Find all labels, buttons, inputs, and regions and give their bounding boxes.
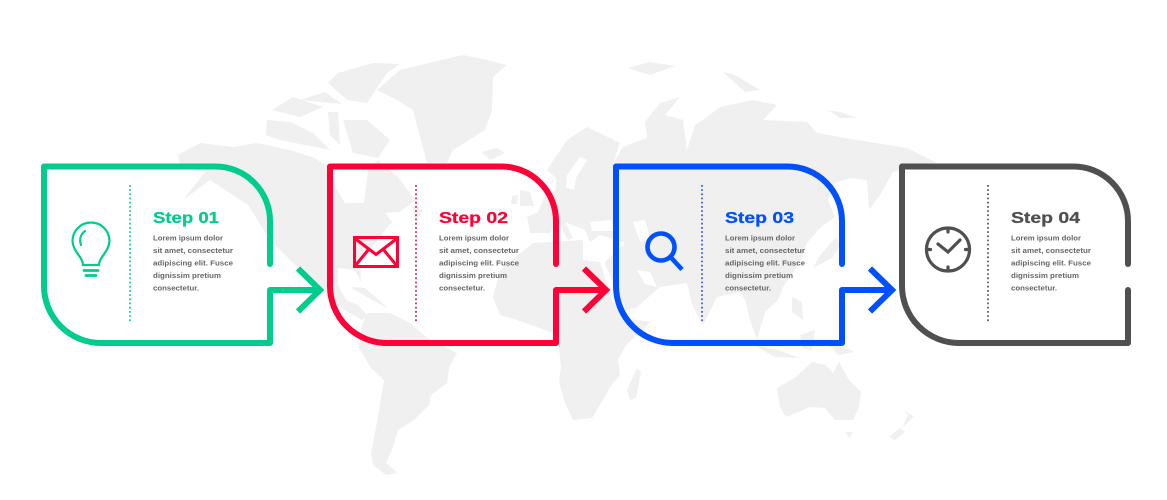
- inland seas: [566, 157, 657, 316]
- Australia: [777, 362, 861, 420]
- dotted divider: [987, 185, 989, 323]
- Eurasia: [527, 97, 937, 340]
- body text: dignissim pretium: [725, 273, 793, 280]
- grey outline: [902, 166, 1128, 343]
- body text: sit amet, consectetur: [1011, 248, 1091, 255]
- body text: consectetur.: [725, 286, 771, 292]
- South America: [359, 313, 457, 475]
- body text: Lorem ipsum dolor: [439, 236, 509, 242]
- green outline with arrow shaft: [44, 166, 320, 343]
- Greenland: [377, 55, 507, 163]
- body text: Lorem ipsum dolor: [1011, 236, 1081, 242]
- body text: [725, 236, 805, 292]
- panel: step 04: [902, 166, 1128, 343]
- body text: sit amet, consectetur: [439, 248, 519, 255]
- body text: dignissim pretium: [439, 273, 507, 280]
- body text: adipiscing elit. Fusce: [439, 260, 519, 268]
- body text: consectetur.: [153, 286, 199, 292]
- arrow head: [584, 268, 606, 312]
- heading: Step 04: [1011, 210, 1080, 227]
- panel: step 01: [44, 166, 320, 343]
- body text: [153, 236, 233, 292]
- Japan: [813, 237, 840, 268]
- Arctic islands: [266, 92, 342, 150]
- icon: envelope: [354, 238, 398, 266]
- body text: sit amet, consectetur: [153, 248, 233, 255]
- body text: consectetur.: [1011, 286, 1057, 292]
- icon: magnifying glass: [648, 234, 682, 270]
- body text: Lorem ipsum dolor: [153, 236, 223, 242]
- dotted divider: [129, 185, 131, 323]
- body text: sit amet, consectetur: [725, 248, 805, 255]
- icon: clock: [926, 228, 970, 271]
- dotted divider: [415, 185, 417, 323]
- body text: Lorem ipsum dolor: [725, 236, 795, 242]
- body text: adipiscing elit. Fusce: [725, 260, 805, 268]
- panel: step 02: [330, 166, 606, 343]
- heading: Step 01: [153, 210, 219, 227]
- Indonesia and Philippines: [753, 297, 855, 358]
- body text: adipiscing elit. Fusce: [1011, 260, 1091, 268]
- blue outline with arrow shaft: [616, 166, 892, 343]
- North America: [178, 143, 415, 320]
- heading: Step 03: [725, 210, 794, 227]
- Iceland, Britain, Ireland: [482, 148, 534, 206]
- dotted divider: [701, 185, 703, 323]
- Africa: [493, 240, 650, 420]
- panel: step 03: [616, 166, 892, 343]
- body text: dignissim pretium: [153, 273, 221, 280]
- icon: light bulb: [72, 222, 110, 276]
- world map background: [178, 55, 937, 475]
- arrow head: [298, 268, 320, 312]
- body text: adipiscing elit. Fusce: [153, 260, 233, 268]
- body text: consectetur.: [439, 286, 485, 292]
- arrow head: [870, 268, 892, 312]
- Tasmania and New Zealand: [845, 410, 914, 440]
- Madagascar: [627, 368, 641, 400]
- Arctic archipelagos: [628, 62, 857, 118]
- Cuba and Newfoundland: [350, 205, 424, 308]
- heading: Step 02: [439, 210, 508, 227]
- body text: dignissim pretium: [1011, 273, 1079, 280]
- Baffin Island: [343, 120, 390, 158]
- body text: [439, 236, 519, 292]
- Ellesmere Island: [328, 63, 400, 103]
- body text: [1011, 236, 1091, 292]
- red outline with arrow shaft: [330, 166, 606, 343]
